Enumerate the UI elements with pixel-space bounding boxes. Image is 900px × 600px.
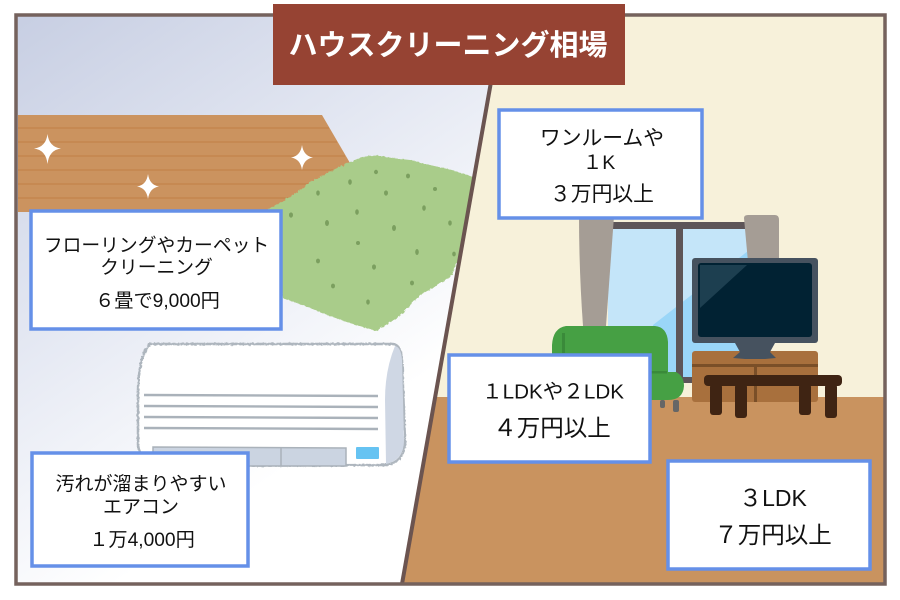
title: ハウスクリーニング相場: [288, 29, 608, 62]
illustration: coffee table: [704, 375, 842, 418]
callout: flooring and carpet cleaning: クリーニング: [100, 256, 213, 278]
callout: air conditioner: １万4,000円: [89, 530, 195, 551]
callout: one room or 1K: [499, 110, 702, 218]
callout: air conditioner: 汚れが溜まりやすい: [55, 473, 227, 495]
illustration: green carpet: [268, 155, 482, 331]
illustration: window: [608, 222, 748, 383]
callout: 3LDK: [668, 461, 870, 569]
callout: air conditioner: [32, 453, 248, 566]
panel: left background: [16, 15, 506, 584]
callout: 1LDK or 2LDK: [449, 355, 650, 462]
callout: 3LDK: ３LDK: [739, 485, 808, 511]
title: [273, 4, 625, 85]
diagonal divider: [402, 82, 491, 584]
callout: 1LDK or 2LDK: １LDKや２LDK: [482, 380, 624, 404]
panel: right room wall: [435, 16, 884, 397]
callout: flooring and carpet cleaning: [31, 211, 281, 329]
callout: one room or 1K: ワンルームや: [540, 127, 664, 150]
callout: flooring and carpet cleaning: フローリングやカーペット: [44, 234, 269, 256]
icon: sparkle right: [291, 145, 313, 170]
illustration: green sofa: [552, 326, 684, 412]
illustration: television: [692, 258, 818, 359]
illustration: floor: [402, 397, 884, 584]
callout: one room or 1K: １K: [583, 152, 615, 174]
illustration: TV board: [692, 351, 818, 402]
icon: sparkle center: [137, 174, 159, 199]
callout: air conditioner: エアコン: [103, 497, 179, 518]
icon: sparkle large: [34, 134, 61, 164]
illustration: air conditioner: [138, 344, 405, 466]
callout: flooring and carpet cleaning: ６畳で9,000円: [95, 291, 220, 312]
callout: one room or 1K: ３万円以上: [550, 183, 654, 206]
callout: 1LDK or 2LDK: ４万円以上: [493, 415, 611, 441]
illustration: wood flooring: [18, 115, 350, 212]
illustration: curtains: [579, 215, 779, 326]
callout: 3LDK: ７万円以上: [714, 522, 832, 548]
